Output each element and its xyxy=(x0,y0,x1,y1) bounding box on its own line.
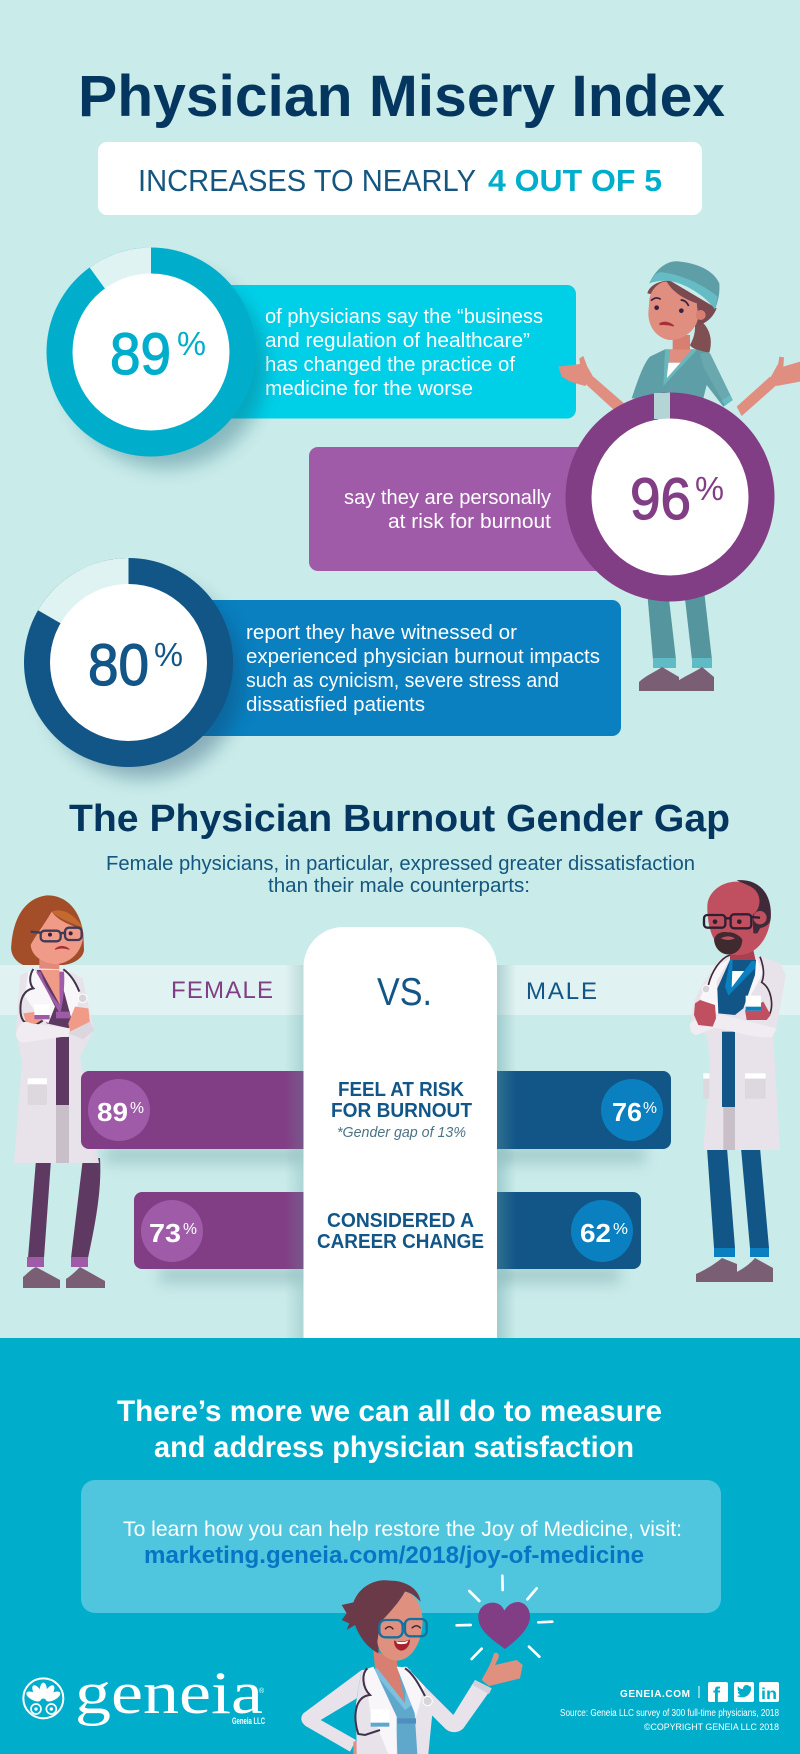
stat panel: 89 percent xyxy=(46,248,576,468)
text tile: witnessed burnout impacts xyxy=(130,600,621,736)
label: considered a career change: CONSIDERED A xyxy=(327,1210,474,1232)
value: male 62 percent: % xyxy=(613,1221,628,1238)
call to action panel: marketing.geneia.com/2018/joy-of-medicine xyxy=(144,1542,644,1569)
text tile: business and regulation: and regulation of healthcare” xyxy=(265,330,530,352)
value: female 73 percent xyxy=(141,1200,203,1262)
copyright note: ©COPYRIGHT GENEIA LLC 2018 xyxy=(644,1722,779,1732)
text tile: business and regulation: of physicians say the “business xyxy=(265,306,543,328)
column labels: MALE xyxy=(526,978,597,1005)
text tile: business and regulation: medicine for the worse xyxy=(265,378,473,400)
website and social icons xyxy=(620,1682,779,1707)
section intro text: Female physicians, in particular, expressed greater dissatisfaction xyxy=(106,853,695,875)
bar row: feel at risk, female and male xyxy=(81,1071,671,1163)
illustration: female doctor xyxy=(11,895,105,1288)
footer heading xyxy=(117,1395,662,1464)
text tile: business and regulation xyxy=(150,285,576,418)
center column xyxy=(285,927,516,1338)
section heading: gender gap: The Physician Burnout Gender Gap xyxy=(69,798,730,840)
text tile: witnessed burnout impacts: experienced physician burnout impacts xyxy=(246,646,600,668)
subtitle banner xyxy=(98,142,702,215)
title: Physician Misery Index xyxy=(78,64,725,129)
call to action panel: To learn how you can help restore the Joy of Medicine, visit: xyxy=(123,1518,682,1541)
icon: heart rays xyxy=(457,1576,552,1659)
footer heading: There’s more we can all do to measure xyxy=(117,1395,662,1428)
logo: geneia xyxy=(23,1660,265,1726)
bar row: career change, female and male xyxy=(134,1192,641,1283)
donut: 96 percent: % xyxy=(695,470,724,507)
header band xyxy=(0,965,800,1015)
donut: 80 percent: % xyxy=(154,636,183,673)
icon: facebook: f xyxy=(713,1684,721,1707)
text tile: personally at risk: at risk for burnout xyxy=(388,511,551,533)
donut: 89 percent: 89 xyxy=(110,322,171,387)
label: feel at risk for burnout: FEEL AT RISK xyxy=(338,1079,465,1101)
value: female 89 percent: 89 xyxy=(97,1097,128,1127)
logo: geneia: ® xyxy=(259,1687,265,1695)
icon: facebook xyxy=(708,1682,728,1707)
value: male 76 percent xyxy=(601,1079,663,1141)
donut: 89 percent xyxy=(46,248,266,468)
value: female 73 percent: % xyxy=(183,1221,197,1238)
value: male 76 percent: 76 xyxy=(612,1097,642,1127)
logo emblem xyxy=(23,1678,63,1718)
value: male 76 percent: % xyxy=(643,1100,657,1117)
subtitle banner: 4 OUT OF 5 xyxy=(488,163,662,198)
text tile: witnessed burnout impacts: report they have witnessed or xyxy=(246,622,517,644)
donut: 89 percent: % xyxy=(177,325,206,362)
text tile: personally at risk xyxy=(309,447,609,571)
illustration: nurse legs xyxy=(639,590,714,691)
label: feel at risk for burnout: FOR BURNOUT xyxy=(331,1100,472,1122)
label: considered a career change xyxy=(317,1210,484,1253)
footer section xyxy=(0,1338,800,1754)
value: male 62 percent xyxy=(571,1200,633,1262)
label: feel at risk for burnout: *Gender gap of 13% xyxy=(337,1124,466,1141)
subtitle banner: INCREASES TO NEARLY xyxy=(138,163,476,198)
illustration: male doctor xyxy=(690,880,786,1282)
text tile: business and regulation: has changed the practice of xyxy=(265,354,515,376)
value: female 89 percent xyxy=(88,1079,150,1141)
icon: heart xyxy=(478,1602,530,1649)
stat panel: 96 percent xyxy=(309,392,774,602)
value: female 89 percent: % xyxy=(130,1100,144,1117)
icon: linkedin xyxy=(759,1682,779,1703)
illustration: worried nurse xyxy=(558,261,800,416)
call to action panel xyxy=(81,1480,721,1613)
logo: geneia: Geneia LLC xyxy=(232,1716,265,1726)
value: female 73 percent: 73 xyxy=(149,1218,181,1248)
donut: 80 percent xyxy=(24,558,243,778)
section intro text xyxy=(106,853,695,897)
icon: linkedin: in xyxy=(761,1686,777,1703)
text tile: personally at risk: say they are personally xyxy=(344,487,551,509)
footer heading: and address physician satisfaction xyxy=(154,1431,634,1464)
stat panel: 80 percent xyxy=(24,558,621,778)
label: feel at risk for burnout xyxy=(331,1079,472,1141)
value: male 62 percent: 62 xyxy=(580,1218,611,1248)
text tile: witnessed burnout impacts: such as cynicism, severe stress and xyxy=(246,670,559,692)
donut: 80 percent: 80 xyxy=(88,633,149,698)
label: considered a career change: CAREER CHANGE xyxy=(317,1231,484,1253)
text tile: witnessed burnout impacts: dissatisfied patients xyxy=(246,694,425,716)
section intro text: than their male counterparts: xyxy=(268,875,530,897)
column labels: FEMALE xyxy=(171,977,273,1004)
center column: VS. xyxy=(377,971,432,1014)
icon: twitter xyxy=(734,1682,754,1702)
logo: geneia: geneia xyxy=(75,1660,263,1726)
website and social icons: GENEIA.COM xyxy=(620,1689,690,1700)
donut: 96 percent xyxy=(566,392,774,602)
column labels xyxy=(171,977,597,1005)
illustration: smiling doctor with heart xyxy=(301,1576,552,1754)
donut: 96 percent: 96 xyxy=(630,467,691,532)
